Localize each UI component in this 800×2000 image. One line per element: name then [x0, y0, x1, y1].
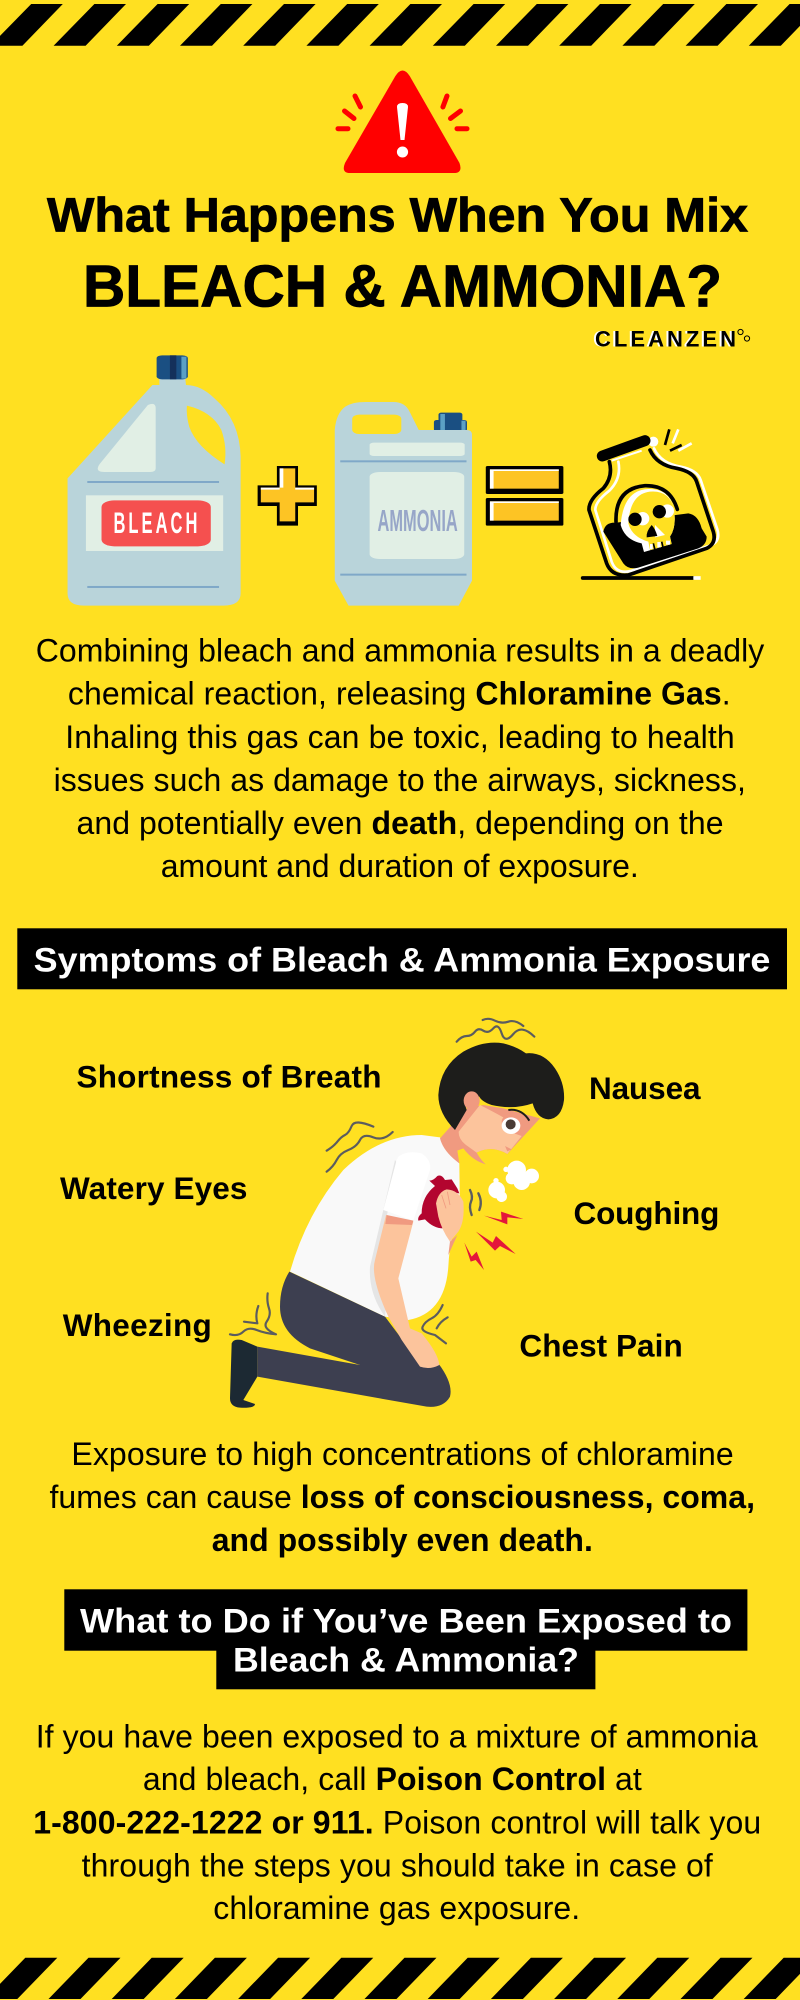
- heading: symptoms: Symptoms of Bleach & Ammonia Exposure: [34, 942, 770, 980]
- icon: plus sign: [258, 466, 317, 526]
- poison control paragraph: [33, 1718, 761, 1926]
- exposure warning paragraph: [50, 1436, 755, 1558]
- heading: symptoms: [17, 928, 787, 989]
- symptom label: wheezing: Wheezing: [63, 1307, 212, 1343]
- intro paragraph: chemical reaction, releasing Chloramine Gas.: [68, 675, 731, 711]
- intro paragraph: amount and duration of exposure.: [161, 848, 639, 884]
- heart, hand, cough clouds and pain bolts: [418, 1161, 539, 1270]
- icon: warning triangle: [338, 70, 467, 173]
- symptom label: watery eyes: Watery Eyes: [60, 1170, 247, 1206]
- top hazard stripe band: [0, 4, 800, 46]
- icon: bleach bottle: [68, 355, 241, 606]
- logo: Cleanzen: CLEANZEN: [593, 326, 734, 352]
- exposure warning paragraph: and possibly even death.: [212, 1522, 593, 1558]
- intro paragraph: issues such as damage to the airways, sickness,: [54, 762, 746, 798]
- intro paragraph: [36, 632, 764, 884]
- poison control paragraph: If you have been exposed to a mixture of ammonia: [36, 1718, 758, 1754]
- heading: what to do: [64, 1589, 747, 1689]
- heading: what to do: What to Do if You’ve Been Exposed to: [80, 1602, 732, 1640]
- intro paragraph: Inhaling this gas can be toxic, leading to health: [65, 719, 735, 755]
- exposure warning paragraph: fumes can cause loss of consciousness, coma,: [50, 1479, 755, 1515]
- icon: ammonia jug: AMMONIA: [378, 505, 458, 538]
- icon: bleach bottle: BLEACH: [114, 507, 200, 540]
- intro paragraph: Combining bleach and ammonia results in a deadly: [36, 632, 764, 668]
- illustration: person in pain: [230, 1019, 564, 1408]
- poison control paragraph: chloramine gas exposure.: [213, 1890, 580, 1926]
- icon: equals sign: [486, 466, 563, 526]
- bottom hazard stripe band: [0, 1958, 800, 1999]
- symptom label: nausea: Nausea: [589, 1070, 701, 1106]
- icon: skull in tilted bottle: [583, 429, 718, 578]
- title line 1: What Happens When You Mix: [47, 190, 748, 242]
- icon: ammonia jug: [335, 402, 472, 606]
- intro paragraph: and potentially even death, depending on the: [76, 805, 724, 841]
- heading: what to do: Bleach & Ammonia?: [233, 1642, 579, 1680]
- symptom label: shortness of breath: Shortness of Breath: [76, 1058, 382, 1094]
- symptom label: coughing: Coughing: [574, 1195, 719, 1231]
- poison control paragraph: 1-800-222-1222 or 911. Poison control will talk you: [33, 1804, 761, 1840]
- exposure warning paragraph: Exposure to high concentrations of chloramine: [71, 1436, 734, 1472]
- symptom label: chest pain: Chest Pain: [519, 1328, 683, 1364]
- body: [230, 1019, 534, 1408]
- head: [438, 1043, 564, 1167]
- logo: Cleanzen: CLEANZEN: [595, 326, 736, 352]
- poison control paragraph: through the steps you should take in case of: [82, 1848, 713, 1884]
- poison control paragraph: and bleach, call Poison Control at: [143, 1761, 642, 1797]
- title line 2: BLEACH & AMMONIA?: [83, 254, 722, 320]
